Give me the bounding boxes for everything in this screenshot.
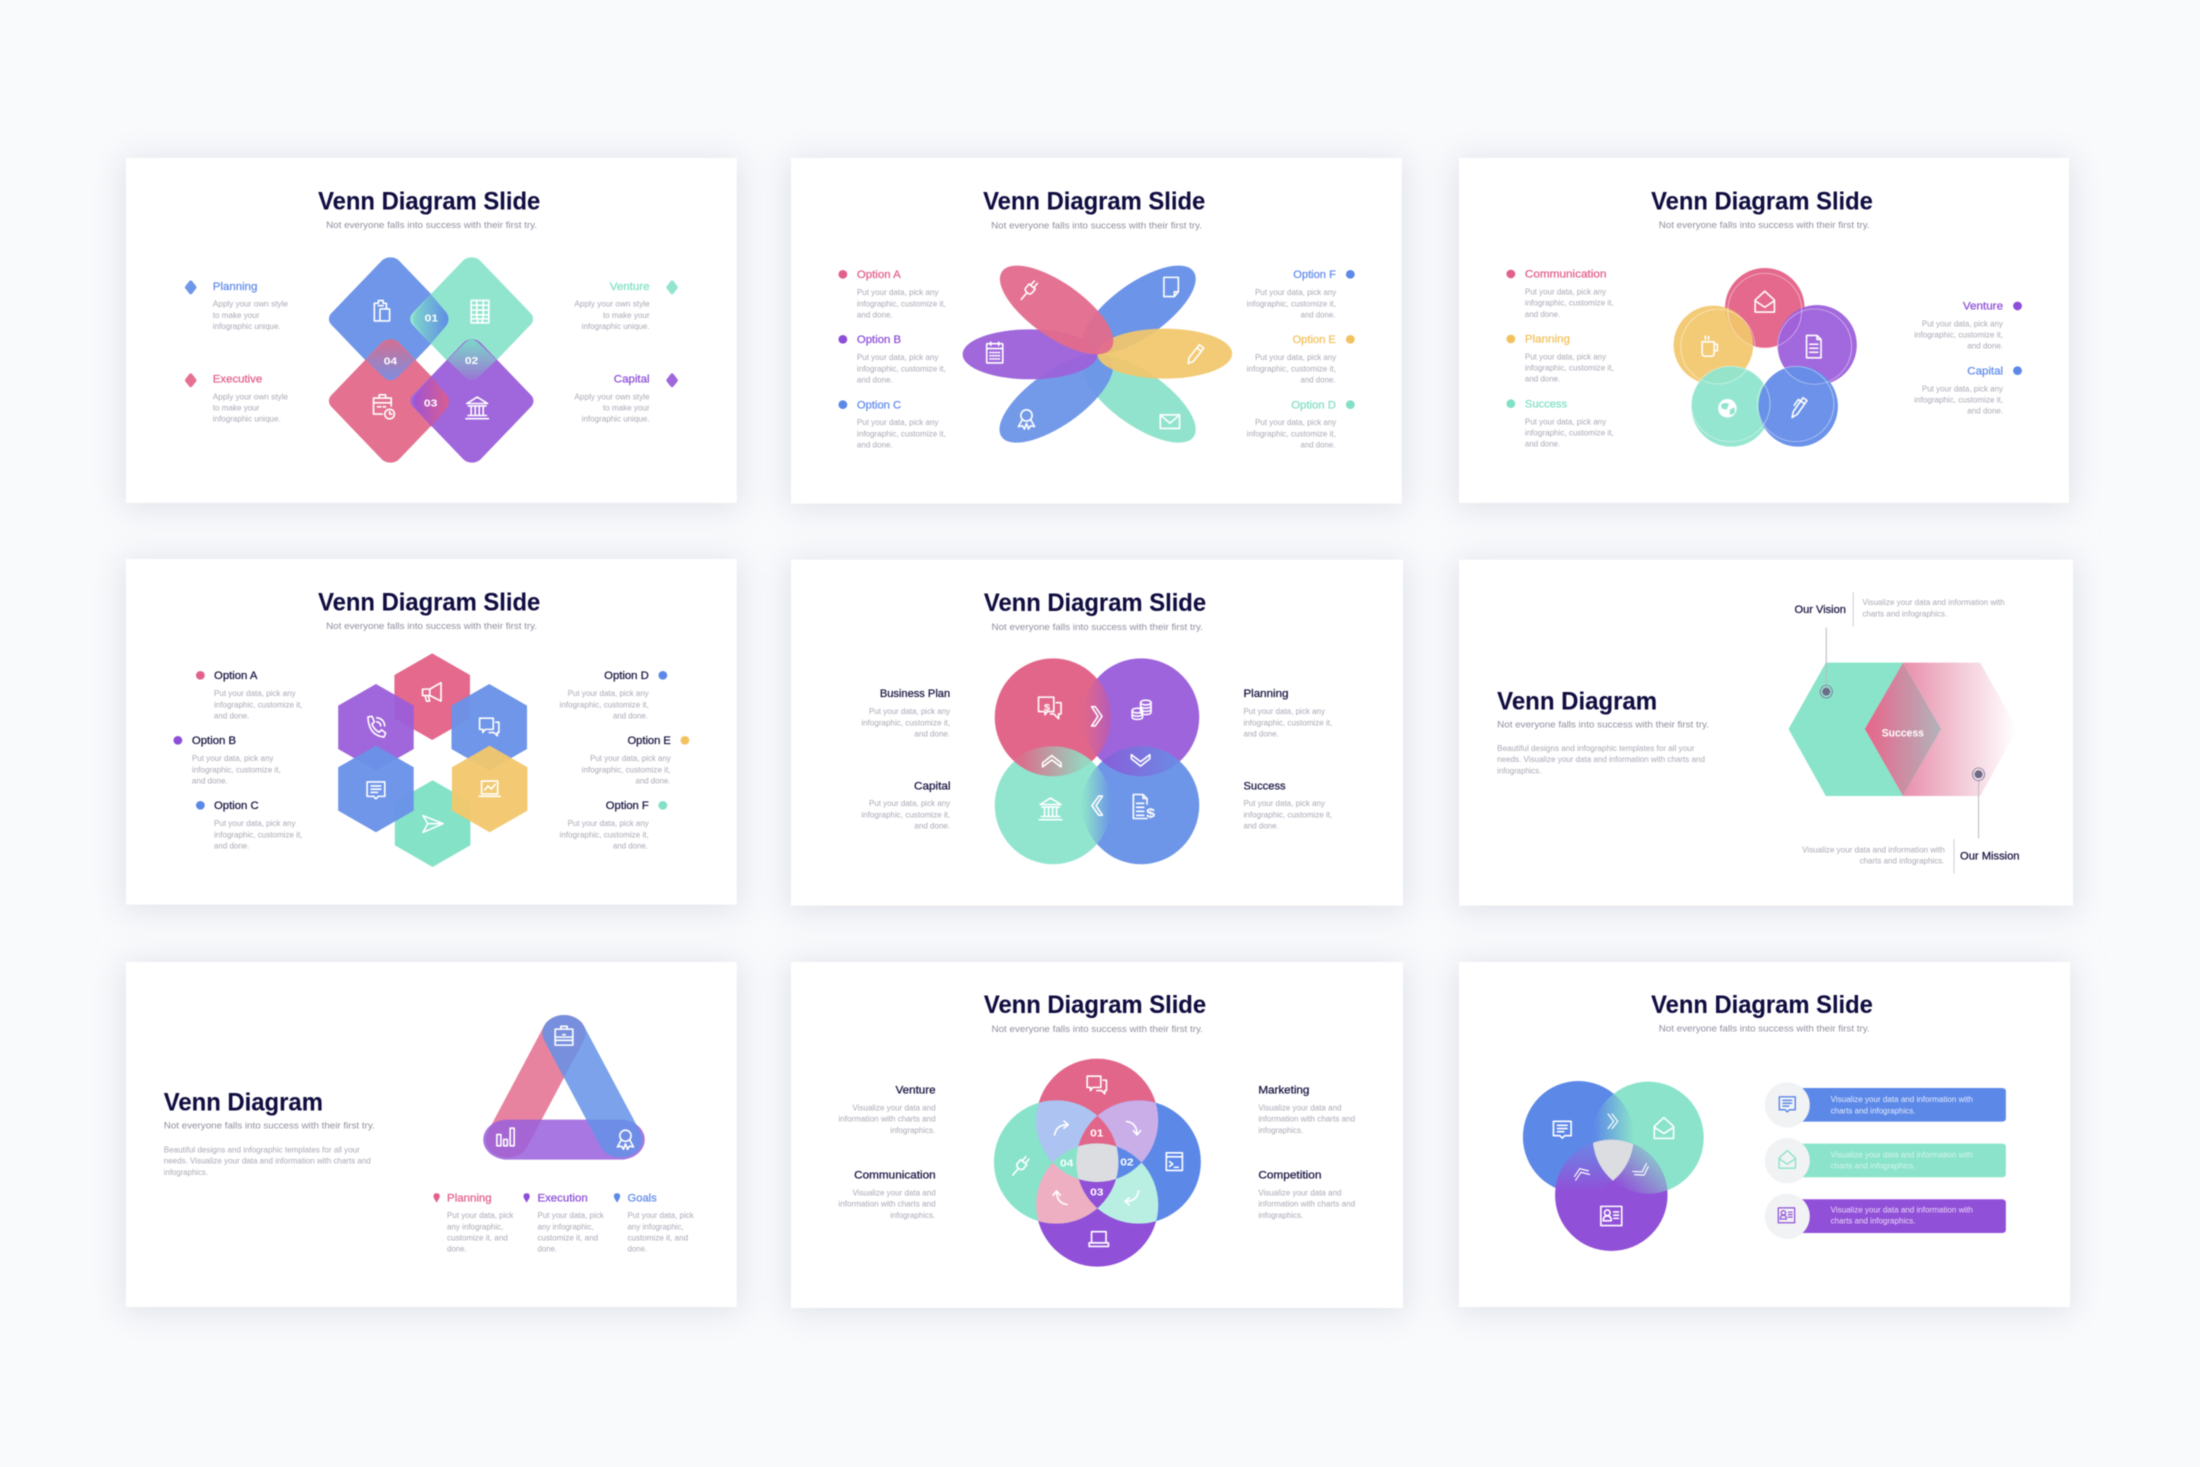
diamond venn diagram: 01 [425,314,438,324]
legend: venture [1914,299,2022,350]
panel: hexagon venn slide [126,559,737,905]
legend: option a: and done. [214,711,249,720]
legend: planning: done. [447,1244,467,1253]
legend: option f: Put your data, pick any [568,819,649,828]
text: communication: infographics. [890,1211,935,1220]
legend: option d: and done. [613,711,648,720]
legend: capital: to make your [603,403,650,412]
legend: execution: done. [537,1244,557,1253]
legend: option b: and done. [857,375,893,384]
legend: execution [523,1192,604,1253]
legend: success: Success [1525,398,1567,410]
text: competition: Visualize your data and [1258,1188,1342,1197]
subtitle: Not everyone falls into success with their first try. [992,623,1203,633]
description [164,1145,371,1177]
legend: option b: Option B [857,333,901,346]
legend: option f: infographic, customize it, [560,830,649,839]
info row: purple: Visualize your data and information with [1831,1205,1973,1214]
legend: option c [838,398,946,449]
text: communication [838,1169,936,1220]
legend: option d [1247,398,1355,449]
text: capital: and done. [914,821,950,830]
legend: success [1506,398,1614,448]
legend: planning: Put your data, pick [447,1211,514,1220]
text: success: and done. [1243,821,1279,830]
legend: capital [574,373,678,423]
text: communication: Visualize your data and [853,1188,936,1197]
four circle diagram: $ [1146,807,1155,821]
legend: planning: infographic unique. [213,322,281,331]
legend: option c: Option C [857,398,902,411]
legend: option e [582,734,689,785]
legend: planning: any infographic, [447,1222,503,1231]
four circle diagram: $ [1044,703,1050,713]
text: marketing [1258,1084,1355,1135]
text: planning: and done. [1243,729,1279,738]
legend: planning [185,280,288,331]
text: competition [1258,1169,1355,1220]
legend: executive: Apply your own style [213,392,288,401]
legend: option e: Option E [627,734,671,747]
legend: option b: infographic, customize it, [857,364,946,373]
legend: option d: and done. [1301,440,1335,449]
text: business plan: Business Plan [880,687,950,700]
panel: triangle venn slide [126,962,737,1307]
description: Beautiful designs and infographic templates for all your [164,1145,360,1154]
four way venn diagram: 04 [1060,1159,1074,1169]
text: marketing: Marketing [1258,1084,1309,1096]
legend: executive: to make your [213,403,259,412]
description: needs. Visualize your data and information with charts and [164,1156,371,1165]
legend: option d: infographic, customize it, [1247,429,1336,438]
info row: blue: charts and infographics. [1831,1106,1915,1115]
four way venn diagram: 02 [1120,1157,1134,1168]
title: Venn Diagram Slide [318,187,540,215]
info row: teal: Visualize your data and information with [1831,1150,1973,1159]
three circle venn diagram [1523,1081,1704,1251]
legend: option a [196,669,302,720]
legend: option f: and done. [613,841,648,850]
legend: option c: Option C [214,799,259,812]
legend: option c: infographic, customize it, [214,830,302,839]
legend: executive [185,373,288,423]
text: marketing: Visualize your data and [1258,1103,1342,1112]
diamond venn diagram: 04 [384,356,398,367]
triangle diagram [497,1026,634,1149]
hexagon diagram [338,653,527,867]
info row: blue [1765,1082,2006,1128]
title: Venn Diagram [1497,687,1657,715]
text: planning: Planning [1243,687,1288,700]
legend: option c [196,799,302,850]
legend: option a: Option A [857,268,901,281]
subtitle: Not everyone falls into success with their first try. [164,1121,375,1131]
legend: goals: any infographic, [627,1222,684,1231]
legend: planning [1506,333,1614,383]
legend: capital: infographic unique. [582,414,650,423]
callout: our vision: charts and infographics. [1862,609,1947,618]
legend: executive: Executive [213,373,263,385]
legend: goals: done. [627,1244,647,1253]
text: planning: infographic, customize it, [1243,718,1332,727]
text: success: Success [1243,779,1286,792]
legend: capital: Capital [614,373,650,385]
legend: option d [560,669,667,720]
text: competition: infographics. [1258,1211,1303,1220]
legend: communication [1506,268,1614,319]
legend: option e: Put your data, pick any [1255,353,1337,362]
legend: venture: Put your data, pick any [1922,319,2004,328]
callout: our mission: Our Mission [1960,850,2020,862]
panel: four circle venn slide [791,560,1403,906]
title: Venn Diagram Slide [1651,990,1873,1018]
legend: venture: infographic unique. [582,322,650,331]
text: business plan: infographic, customize it, [861,718,950,727]
legend: venture: Venture [1963,299,2003,312]
text: planning: Put your data, pick any [1243,707,1326,716]
petal diagram [963,251,1232,457]
overlapping hexagon chart [1788,663,2018,796]
legend: communication: Put your data, pick any [1525,287,1607,296]
info row: teal: charts and infographics. [1831,1161,1915,1170]
text: success: Put your data, pick any [1243,799,1326,808]
legend: venture [574,280,678,331]
description: Beautiful designs and infographic templates for all your [1497,744,1695,753]
legend: option c: infographic, customize it, [857,429,946,438]
text: business plan: and done. [914,729,950,738]
legend: option f: Option F [1293,268,1336,281]
legend: option b: Put your data, pick any [857,353,939,362]
legend: success: infographic, customize it, [1525,428,1614,437]
text: business plan [861,687,951,738]
info row: teal [1765,1138,2006,1183]
legend: option a: Put your data, pick any [857,288,939,297]
subtitle: Not everyone falls into success with their first try. [1659,221,1870,231]
description: needs. Visualize your data and information with charts and [1497,755,1705,764]
legend: option b: Put your data, pick any [192,754,274,763]
panel: petal venn slide [791,158,1402,504]
legend: execution: any infographic, [537,1222,594,1231]
legend: option d: Put your data, pick any [1255,418,1337,427]
legend: success: Put your data, pick any [1525,417,1607,426]
legend: option e [1247,333,1355,384]
description [1497,744,1705,775]
legend: option f [1247,268,1355,319]
text: capital: infographic, customize it, [861,810,950,819]
title: Venn Diagram Slide [983,187,1205,215]
callout: our vision: Visualize your data and information with [1862,598,2005,607]
legend: option f: infographic, customize it, [1247,299,1336,308]
legend: communication: infographic, customize it, [1525,298,1614,307]
text: venture: information with charts and [838,1114,936,1123]
legend: execution: customize it, and [537,1233,598,1242]
legend: capital: Capital [1967,364,2003,377]
legend: planning: Apply your own style [213,299,288,308]
legend: option c: and done. [857,440,893,449]
legend: option b: Option B [192,734,236,747]
legend: option c: Put your data, pick any [857,418,939,427]
text: marketing: information with charts and [1258,1114,1355,1123]
diamond venn diagram: 02 [465,356,478,367]
text: venture: Visualize your data and [853,1103,936,1112]
text: communication: information with charts and [838,1199,936,1208]
legend: option d: Option D [604,669,649,682]
legend: goals [614,1192,694,1253]
legend: planning: infographic, customize it, [1525,363,1614,372]
legend: capital: and done. [1967,406,2003,415]
legend: goals: customize it, and [627,1233,688,1242]
panel: three circle venn slide [1459,962,2070,1307]
text: business plan: Put your data, pick any [869,707,951,716]
legend: option f: Put your data, pick any [1255,288,1337,297]
infographic: nine venn diagram slides [114,150,2084,1322]
legend: option a: and done. [857,310,893,319]
legend: option d: Option D [1291,398,1336,411]
legend: capital: infographic, customize it, [1914,395,2003,404]
text: capital: Put your data, pick any [869,799,951,808]
panel: diamond venn slide [126,158,737,503]
text: capital: Capital [914,779,951,792]
legend: option e: and done. [636,776,670,785]
legend: capital [1914,364,2022,415]
legend: option a: infographic, customize it, [857,299,946,308]
text: marketing: infographics. [1258,1126,1303,1135]
legend: option a: Option A [214,669,258,682]
legend: option a [838,268,946,319]
legend: planning: Put your data, pick any [1525,352,1607,361]
legend: planning: and done. [1525,374,1560,383]
panel: five circle venn slide [1459,158,2069,503]
legend: option c: and done. [214,841,249,850]
legend: option e: Option E [1292,333,1336,346]
panel: four way venn slide [791,962,1403,1308]
text: communication: Communication [854,1169,936,1181]
legend: option a: Put your data, pick any [214,689,296,698]
legend: option d: infographic, customize it, [560,700,649,709]
title: Venn Diagram [164,1088,323,1116]
legend: option d: Put your data, pick any [568,689,649,698]
text: competition: information with charts and [1258,1199,1355,1208]
legend: option b [838,333,946,384]
legend: option f: Option F [606,799,649,812]
diamond venn diagram: 03 [424,399,437,409]
legend: option e: and done. [1301,375,1335,384]
callout: our vision: Our Vision [1795,603,1846,616]
legend: goals: Goals [627,1192,657,1204]
subtitle: Not everyone falls into success with their first try. [326,221,537,231]
legend: venture: to make your [603,311,650,320]
info row: purple [1765,1194,2006,1239]
subtitle: Not everyone falls into success with their first try. [992,1025,1203,1035]
text: venture: Venture [895,1084,936,1096]
legend: option b: infographic, customize it, [192,765,281,774]
legend: venture: Venture [610,280,650,293]
legend: planning: Planning [447,1192,492,1204]
callout: our vision [1795,592,2005,698]
legend: planning: Planning [1525,333,1570,345]
description: infographics. [1497,766,1541,775]
legend: option f [560,799,667,850]
text: venture: infographics. [890,1126,935,1135]
legend: planning [433,1192,514,1253]
info row: purple: charts and infographics. [1831,1216,1915,1225]
legend: option e: infographic, customize it, [1247,364,1336,373]
title: Venn Diagram Slide [1651,187,1873,215]
subtitle: Not everyone falls into success with their first try. [991,221,1202,231]
callout: our mission [1802,768,2020,873]
four way venn diagram: 01 [1090,1128,1103,1139]
overlapping hexagon chart: Success [1882,726,1924,739]
text: planning [1243,687,1332,738]
legend: option b [173,734,281,785]
title: Venn Diagram Slide [984,990,1206,1018]
legend: capital: Apply your own style [574,392,650,401]
legend: option a: infographic, customize it, [214,700,302,709]
subtitle: Not everyone falls into success with their first try. [326,622,537,632]
panel: hexagon overlap slide [1459,560,2073,906]
four circle diagram [995,658,1199,864]
legend: venture: Apply your own style [574,299,650,308]
legend: communication: Communication [1525,268,1606,280]
text: success: infographic, customize it, [1243,810,1332,819]
callout: our mission: Visualize your data and information with [1802,845,1945,854]
legend: planning: customize it, and [447,1233,508,1242]
info row: blue: Visualize your data and information with [1831,1095,1973,1104]
legend: option c: Put your data, pick any [214,819,296,828]
legend: communication: and done. [1525,310,1560,319]
legend: option e: Put your data, pick any [590,754,671,763]
text: competition: Competition [1258,1169,1321,1181]
callout: our mission: charts and infographics. [1860,856,1944,865]
text: success [1243,779,1332,830]
subtitle: Not everyone falls into success with their first try. [1659,1024,1870,1034]
text: venture [838,1084,936,1135]
title: Venn Diagram Slide [984,588,1206,616]
title: Venn Diagram Slide [318,588,540,616]
legend: venture: and done. [1967,341,2003,350]
legend: option f: and done. [1301,310,1335,319]
text: capital [861,779,951,830]
legend: venture: infographic, customize it, [1914,330,2003,339]
legend: executive: infographic unique. [213,414,281,423]
four way venn diagram [994,1059,1201,1267]
legend: success: and done. [1525,439,1560,448]
legend: goals: Put your data, pick [627,1211,694,1220]
legend: execution: Execution [537,1192,588,1204]
legend: planning: to make your [213,311,259,320]
legend: execution: Put your data, pick [537,1211,604,1220]
legend: capital: Put your data, pick any [1922,384,2004,393]
legend: option b: and done. [192,776,228,785]
subtitle: Not everyone falls into success with their first try. [1497,720,1709,730]
five circle diagram [1674,268,1857,447]
legend: option e: infographic, customize it, [582,765,670,774]
description: infographics. [164,1168,208,1177]
legend: planning: Planning [213,280,257,293]
four way venn diagram: 03 [1090,1188,1103,1198]
diamond venn diagram [340,267,522,453]
